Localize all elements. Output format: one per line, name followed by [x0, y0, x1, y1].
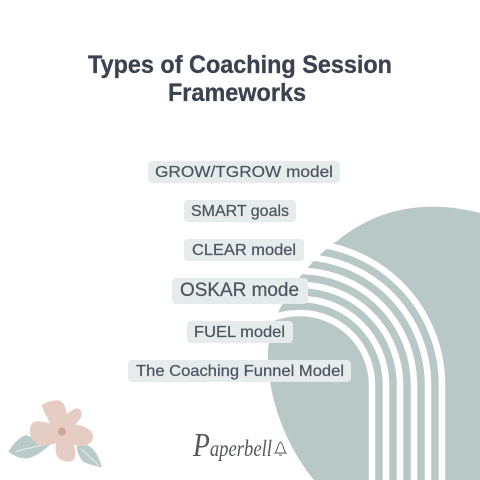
label: The Coaching Funnel Model — [128, 360, 351, 382]
title: Frameworks — [168, 79, 306, 107]
icon: flower with leaves — [8, 400, 102, 467]
label: The Coaching Funnel Model: The Coaching Funnel Model — [136, 363, 344, 380]
label: GROW/TGROW model — [148, 161, 340, 183]
label: CLEAR model — [184, 239, 304, 261]
arch stripes — [272, 243, 442, 480]
label: CLEAR model: CLEAR model — [192, 242, 296, 259]
logo: Paperbell: Paperbell — [192, 427, 272, 464]
label: SMART goals: SMART goals — [191, 203, 289, 220]
label: FUEL model: FUEL model — [194, 324, 285, 341]
label: FUEL model — [187, 321, 293, 343]
label: SMART goals — [184, 200, 296, 222]
background shape: arch blob — [268, 207, 480, 480]
title — [88, 51, 392, 107]
icon: bell — [275, 442, 286, 455]
label: GROW/TGROW model: GROW/TGROW model — [155, 164, 333, 181]
title: Types of Coaching Session — [88, 51, 392, 79]
label: OSKAR mode: OSKAR mode — [180, 279, 299, 301]
